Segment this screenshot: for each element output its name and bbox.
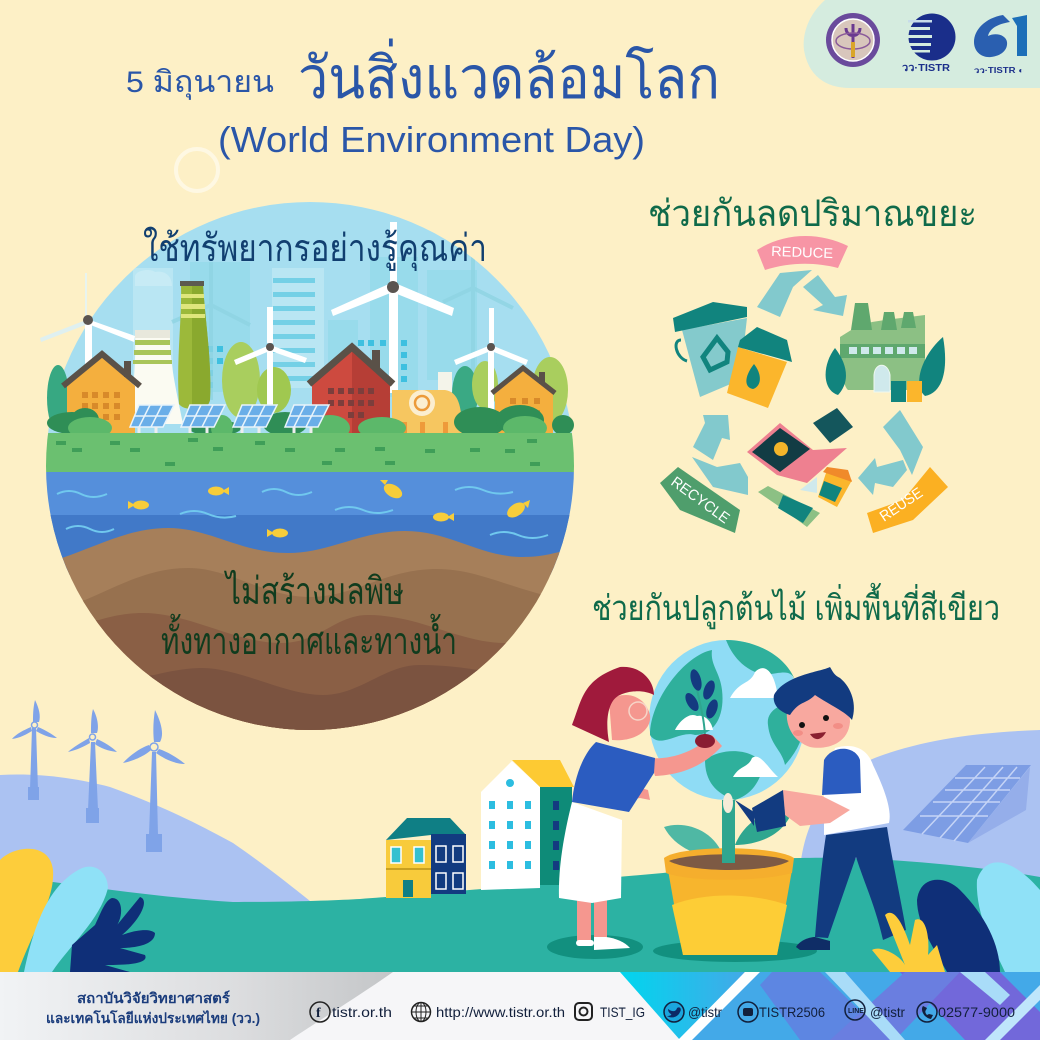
right hill with solar panel: [800, 730, 1040, 880]
date: 5 มิถุนายน: [126, 66, 274, 101]
logo: 61: [974, 15, 1027, 75]
small house: [386, 818, 466, 898]
pot: [664, 838, 794, 955]
legs: [577, 900, 607, 942]
shirt: [824, 746, 890, 835]
logo: TISTR: [896, 14, 956, 74]
banner: reduce: [757, 236, 848, 270]
left tree: [47, 365, 69, 431]
yellow tank: [392, 390, 462, 434]
english subheading: (World Environment Day): [218, 119, 645, 160]
footer bar: [0, 972, 1040, 1040]
soil layers: [62, 528, 560, 730]
website: http://www.tistr.or.th: [436, 1004, 565, 1020]
water: [40, 472, 580, 575]
hair: [774, 667, 854, 720]
facebook: f: [316, 1006, 321, 1021]
trousers: [815, 827, 906, 940]
light blue leaf: [977, 862, 1040, 972]
facebook: [310, 1002, 392, 1022]
banner: reduce: REDUCE: [771, 243, 833, 261]
tall house: [481, 760, 574, 890]
recycling arrows: [692, 270, 923, 495]
heading: reduce waste: ช่วยกันลดปริมาณขยะ: [648, 193, 977, 234]
hair: [572, 667, 654, 742]
arms: [650, 735, 722, 776]
grass and underground: [40, 433, 585, 740]
facebook: tistr.or.th: [332, 1004, 392, 1020]
logo panel: [804, 0, 1040, 88]
institute name: [46, 990, 260, 1026]
small orange house: [492, 368, 555, 434]
stem and leaves: [664, 800, 794, 875]
heading: use resources wisely: ใช้ทรัพยากรอย่างรู้คุณค่า: [143, 227, 487, 271]
logo: seal: [826, 13, 880, 67]
pot shadow: [653, 940, 817, 962]
yellow plant: [872, 913, 945, 972]
ground: [0, 858, 1040, 975]
footer geometric pattern: [620, 972, 1040, 1040]
bushes: [47, 405, 574, 437]
large solar panel: [903, 765, 1031, 843]
girl: [547, 667, 722, 959]
navy fern: [70, 897, 155, 972]
sandals: [576, 937, 630, 950]
phone: [917, 1002, 1015, 1022]
line: LINE: [848, 1008, 864, 1015]
banner: reuse: [867, 467, 948, 533]
orange house: [63, 354, 140, 433]
twitter: @tistr: [688, 1004, 722, 1020]
banner: reuse: REUSE: [877, 484, 926, 525]
factory: [826, 303, 945, 402]
e-waste: laptop, battery, bottle, cup: [747, 408, 853, 527]
boy: [723, 667, 906, 950]
plant in pot: [653, 800, 817, 962]
sky and city: [40, 200, 580, 440]
website: [411, 1002, 565, 1022]
text: no pollution: [161, 570, 457, 663]
globe: [649, 640, 805, 800]
text: no pollution: ไม่สร้างมลพิษ: [224, 570, 404, 613]
shirt: [572, 742, 655, 812]
twitter: [664, 1002, 722, 1022]
social contacts: [310, 1000, 1015, 1022]
foreground plants left: [0, 849, 155, 972]
institute name: สถาบันวิจัยวิทยาศาสตร์: [77, 990, 231, 1006]
main heading: วันสิ่งแวดล้อมโลก: [298, 38, 720, 111]
light blue leaf: [24, 867, 108, 972]
seedling: [683, 668, 720, 748]
instagram: TIST_IG: [600, 1004, 645, 1020]
instagram: [575, 1003, 645, 1020]
eyes and mouth: [793, 715, 843, 739]
background turbines: [172, 257, 513, 400]
left hill with turbines: [0, 700, 315, 905]
line: [845, 1000, 905, 1020]
decorative ring: [176, 149, 218, 191]
solar panels: [130, 405, 329, 433]
recycling diagram: [660, 236, 948, 533]
green smokestack: [178, 281, 210, 410]
foreground plants right: [872, 862, 1040, 972]
red house: [309, 346, 393, 433]
cooling tower: [128, 330, 183, 424]
phone: 02577-9000: [938, 1004, 1015, 1020]
shoe: [796, 937, 830, 950]
wind turbines: [40, 222, 528, 409]
turbine group: [12, 700, 185, 852]
title: [126, 38, 720, 160]
banner: recycle: RECYCLE: [668, 473, 733, 527]
youtube: [738, 1002, 825, 1022]
head: [787, 692, 850, 748]
bins: [673, 302, 792, 408]
fish: [128, 480, 530, 538]
watering can: [723, 790, 786, 832]
clouds: [675, 668, 778, 777]
institute name: และเทคโนโลยีแห่งประเทศไทย (วว.): [46, 1009, 260, 1026]
logo: 61: วว·TISTR ◐: [974, 66, 1024, 75]
logo: TISTR: วว·TISTR: [902, 63, 951, 74]
line: @tistr: [870, 1004, 905, 1020]
youtube: TISTR2506: [759, 1004, 825, 1020]
text: no pollution: ทั้งทางอากาศและทางน้ำ: [161, 613, 457, 663]
yellow leaf: [0, 849, 53, 972]
arm: [783, 790, 850, 826]
skirt: [559, 802, 622, 903]
illustration: sustainable earth cross-section: [40, 200, 585, 740]
trees: [222, 342, 568, 423]
glasses: [629, 702, 647, 720]
face: [609, 695, 650, 740]
navy leaf: [917, 880, 1000, 972]
